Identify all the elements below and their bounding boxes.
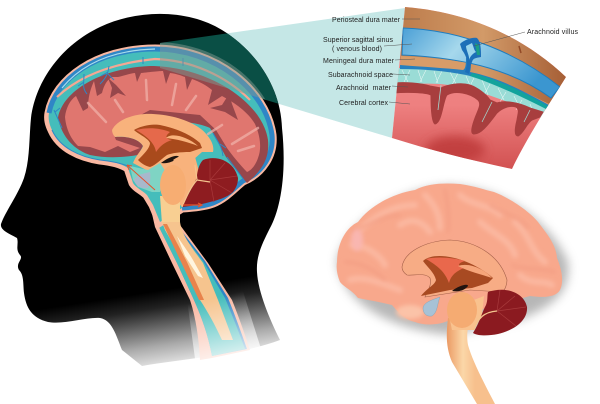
cortex ridge with sulci (393, 83, 543, 136)
villus green cap (475, 43, 480, 55)
blue dura line (49, 49, 272, 208)
cerebellum white tract (182, 165, 210, 207)
arachnoid villus (460, 38, 481, 74)
cerebellum folia (497, 290, 526, 326)
panel wedge: zoom projection (160, 8, 405, 138)
CSF flow arrow lower (183, 203, 202, 207)
wedge over head (160, 33, 278, 104)
ventricle dark slit (161, 156, 179, 163)
tract to cerebellum (448, 296, 484, 330)
inner chamber (421, 256, 493, 296)
teal membrane band (470, 73, 548, 109)
granulations and veins (54, 57, 244, 180)
pituitary blue (134, 172, 150, 188)
brain outer lobes (337, 184, 562, 324)
whole brain illustration (337, 184, 568, 404)
head silhouette (1, 14, 284, 366)
Y shaped sulci (108, 78, 238, 120)
cortex pink gyri (65, 71, 260, 172)
spinal fade (186, 282, 262, 366)
pons (447, 292, 477, 328)
deep cortex shade (425, 136, 485, 164)
pink dura strip (57, 59, 250, 100)
label: Superior sagittal sinus: Superior sagittal sinus (323, 37, 394, 44)
inner chamber bright (426, 258, 470, 283)
label: Cerebral cortex (339, 100, 410, 107)
cerebral cortex tissue (392, 7, 566, 169)
label: Superior sagittal sinus: ( venous blood) (332, 46, 382, 53)
corpus callosum outline (402, 240, 507, 297)
meningeal dura (400, 56, 549, 110)
cortex streaks (88, 80, 258, 151)
cistern teal (130, 163, 166, 192)
label: Arachnoid villus (474, 29, 578, 46)
brain drop shadow (337, 186, 568, 335)
label: Periosteal dura mater: Periosteal dura mater (332, 17, 401, 24)
cerebellum (182, 158, 238, 207)
pale temporal highlight (396, 305, 424, 319)
inner chamber bright (136, 128, 172, 152)
ventricle slit (452, 285, 468, 291)
cerebellum (473, 290, 527, 335)
lobe shading (345, 190, 555, 280)
brain membranes (49, 49, 272, 222)
cortex dark band (58, 66, 268, 183)
pink frontal spot (351, 229, 363, 251)
periosteal dura (400, 7, 566, 110)
arachnoid trabeculae (402, 70, 532, 110)
lobe highlights (350, 195, 552, 290)
label: Subarachnoid space: Subarachnoid space (328, 72, 393, 79)
inner chamber dark (134, 125, 202, 167)
spinal cord (447, 318, 495, 404)
arbor tract (474, 311, 497, 330)
wedge tint on brain (160, 42, 266, 100)
panel: meninges detail (392, 7, 566, 169)
thalamus highlight (166, 135, 198, 146)
subarachnoid space (394, 68, 546, 118)
pons (160, 165, 186, 205)
label: Arachnoid villus: Arachnoid villus (527, 29, 578, 36)
villus lumen (466, 43, 476, 60)
sagittal brain section (44, 42, 277, 360)
cord orange edge (163, 224, 204, 300)
thalamus pale (458, 265, 492, 278)
label: Arachnoid mater: Arachnoid mater (336, 85, 392, 92)
lower blue line (52, 130, 128, 166)
dura inner blue band (400, 58, 549, 108)
spine teal fill (156, 205, 245, 356)
cord pale top (160, 196, 180, 224)
spinal cord (162, 222, 233, 340)
peach column (173, 153, 200, 207)
spine blue layer (156, 205, 247, 356)
corpus callosum (112, 114, 213, 172)
pale sinus highlight (62, 49, 155, 88)
brown vessel marks (519, 46, 521, 53)
CSF flow arrow (127, 165, 155, 190)
pituitary drop (423, 297, 440, 316)
light sulcus lines (438, 85, 530, 122)
cerebellum folia (210, 160, 237, 202)
cord white highlight (177, 236, 203, 278)
label: Superior sagittal sinus (323, 37, 412, 53)
superior sagittal sinus (402, 28, 560, 98)
label: Meningeal dura mater: Meningeal dura mater (323, 58, 395, 65)
label: Cerebral cortex: Cerebral cortex (339, 100, 388, 107)
spine peach sheath (150, 205, 250, 360)
